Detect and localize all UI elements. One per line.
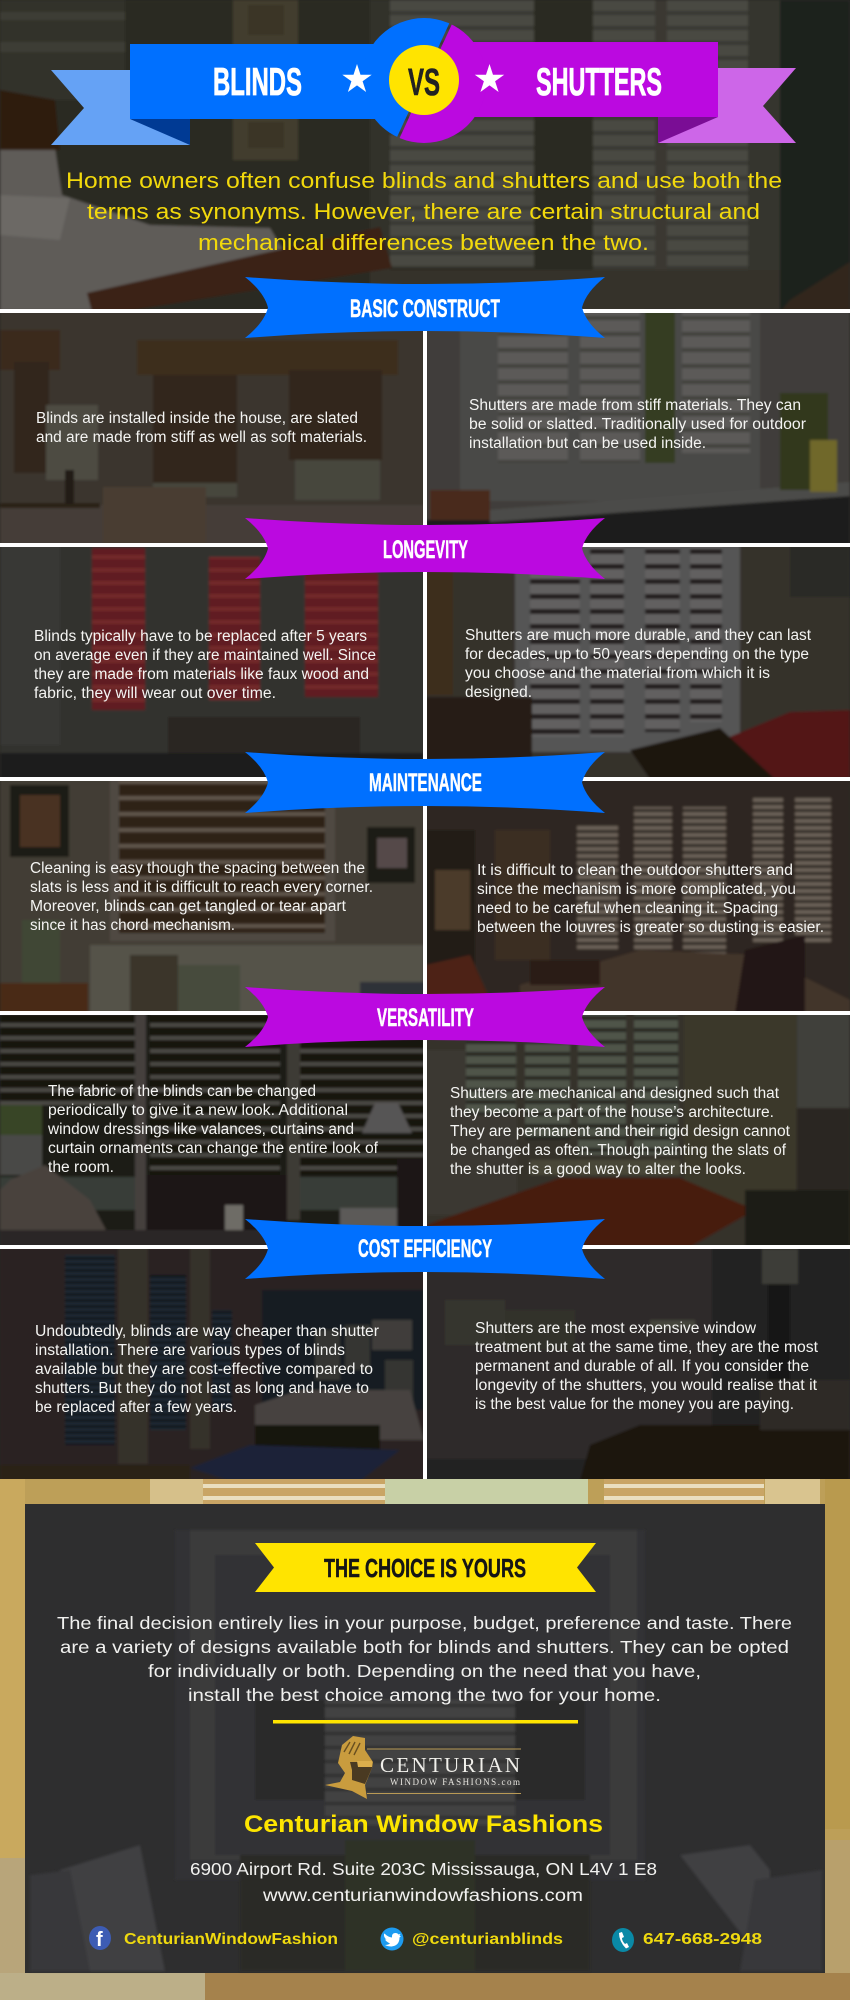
text: cost efficiency, blinds: Undoubtedly, blinds are way cheaper than shutter [35, 1323, 379, 1340]
section ribbon: longevity: LONGEVITY [383, 536, 468, 564]
text: longevity, shutters: Shutters are much more durable, and they can last [465, 627, 812, 644]
section ribbon: maintenance [245, 752, 605, 813]
text: longevity, blinds [34, 628, 376, 702]
text: versatility, shutters: be changed as often. Though painting the slats of [450, 1142, 787, 1159]
photo: sitting room with dark shutters [426, 779, 850, 1013]
photo: living room with roman shades [0, 311, 424, 545]
section ribbon: versatility: VERSATILITY [377, 1004, 474, 1032]
photo: dining room with plantation shutters [426, 545, 850, 779]
vs badge [389, 45, 459, 115]
header banner: blinds vs shutters [51, 18, 796, 145]
panel: the choice is yours [25, 1504, 825, 1973]
text: maintenance, shutters: need to be careful when cleaning it. Spacing [477, 900, 778, 917]
text: cost efficiency, blinds: shutters. But they do not last as long and have to [35, 1380, 369, 1397]
blue banner half [130, 18, 450, 137]
text: maintenance, shutters: It is difficult to clean the outdoor shutters and [477, 862, 793, 879]
address and website: www.centurianwindowfashions.com [262, 1885, 583, 1905]
text: basic construct, shutters [469, 397, 806, 452]
panel: longevity, shutters [426, 545, 850, 779]
section ribbon: maintenance: MAINTENANCE [369, 769, 482, 797]
text: versatility, shutters [450, 1085, 791, 1178]
text: basic construct, blinds [36, 410, 367, 446]
social: phone: 647-668-2948 [643, 1931, 762, 1948]
text: cost efficiency, shutters: longevity of the shutters, you would realise that it [475, 1377, 818, 1394]
yellow ribbon heading [255, 1543, 596, 1592]
photo: room with dark wood blinds [0, 1013, 424, 1247]
address and website: 6900 Airport Rd. Suite 203C Mississauga, ON L4V 1 E8 [190, 1859, 657, 1879]
company name: Centurian Window Fashions [244, 1811, 603, 1838]
intro text: terms as synonyms. However, there are certain structural and [87, 199, 760, 224]
panel: cost efficiency, blinds [0, 1247, 424, 1481]
text: versatility, shutters: They are permanent and their rigid design cannot [450, 1123, 791, 1140]
text: longevity, blinds: on average even if they are maintained well. Since [34, 647, 376, 664]
text: cost efficiency, blinds [35, 1323, 379, 1416]
text: cost efficiency, blinds: be replaced after a few years. [35, 1399, 237, 1416]
conclusion text: install the best choice among the two for your home. [188, 1685, 661, 1705]
conclusion text: are a variety of designs available both for blinds and shutters. They can be opted [60, 1637, 789, 1657]
section ribbon: cost efficiency [245, 1219, 605, 1279]
text: longevity, blinds: Blinds typically have to be replaced after 5 years [34, 628, 367, 645]
title: blinds: BLINDS [213, 61, 302, 104]
panel: basic construct, blinds [0, 311, 424, 545]
text: versatility, shutters: the shutter is a good way to alter the looks. [450, 1161, 746, 1178]
photo: hallway with grey shutters [426, 1013, 850, 1247]
section ribbon: longevity [245, 518, 605, 579]
text: maintenance, shutters: since the mechanism is more complicated, you [477, 881, 796, 898]
intro text: mechanical differences between the two. [198, 230, 649, 255]
text: cost efficiency, shutters: permanent and durable of all. If you consider the [475, 1358, 809, 1375]
section ribbon: cost efficiency: COST EFFICIENCY [358, 1235, 492, 1263]
panel background [25, 1504, 825, 1973]
text: maintenance, blinds [30, 860, 373, 934]
text: maintenance, shutters [477, 862, 824, 936]
text: longevity, shutters: you choose and the material from which it is [465, 665, 770, 682]
text: longevity, blinds: they are made from materials like faux wood and [34, 666, 369, 683]
panel: longevity, blinds [0, 545, 424, 779]
photo: dining room background [0, 1479, 850, 2000]
purple banner half [400, 24, 718, 143]
photo: kitchen with white shutters [426, 311, 850, 545]
title: shutters: SHUTTERS [536, 61, 662, 104]
text: cost efficiency, shutters [475, 1320, 819, 1413]
social: twitter: @centurianblinds [412, 1931, 563, 1948]
panel: versatility, shutters [426, 1013, 850, 1247]
text: basic construct, blinds: and are made from stiff as well as soft materials. [36, 429, 367, 446]
address and website [190, 1859, 657, 1905]
photo: lounge with wood blinds [0, 779, 424, 1013]
text: versatility, blinds: curtain ornaments can change the entire look of [48, 1140, 379, 1157]
panel: maintenance, shutters [426, 779, 850, 1013]
text: longevity, shutters [465, 627, 812, 701]
panel: maintenance, blinds [0, 779, 424, 1013]
text: maintenance, blinds: Cleaning is easy though the spacing between the [30, 860, 365, 877]
intro text: Home owners often confuse blinds and shutters and use both the [66, 168, 782, 193]
section ribbon: versatility [245, 987, 605, 1047]
icon: phone [612, 1928, 634, 1952]
left ribbon tail [51, 70, 190, 145]
text: maintenance, blinds: slats is less and it is difficult to reach every corner. [30, 879, 373, 896]
conclusion text: The final decision entirely lies in your purpose, budget, preference and taste. There [57, 1613, 792, 1633]
logo: centurian window fashions [325, 1736, 521, 1799]
text: cost efficiency, shutters: is the best value for the money you are paying. [475, 1396, 794, 1413]
logo: centurian window fashions: CENTURIAN [380, 1753, 520, 1777]
text: versatility, blinds: periodically to give it a new look. Additional [48, 1102, 348, 1119]
text: versatility, shutters: they become a part of the house’s architecture. [450, 1104, 774, 1121]
text: versatility, shutters: Shutters are mechanical and designed such that [450, 1085, 780, 1102]
social: phone [612, 1928, 762, 1952]
section ribbon: basic construct [245, 277, 605, 338]
text: longevity, blinds: fabric, they will wear out over time. [34, 685, 276, 702]
conclusion text [57, 1613, 792, 1705]
logo: centurian window fashions: WINDOW FASHIONS.com [390, 1777, 520, 1787]
icon: star right [475, 64, 504, 92]
text: versatility, blinds: The fabric of the blinds can be changed [48, 1083, 316, 1100]
photo: room with red zebra blinds [0, 545, 424, 779]
panel: versatility, blinds [0, 1013, 424, 1247]
photo: dim room with clock [426, 1247, 850, 1481]
text: basic construct, shutters: be solid or slatted. Traditionally used for outdoor [469, 416, 806, 433]
section ribbon: basic construct: BASIC CONSTRUCT [350, 295, 500, 323]
text: longevity, shutters: for decades, up to 50 years depending on the type [465, 646, 809, 663]
text: versatility, blinds: the room. [48, 1159, 114, 1176]
vs badge: VS [408, 62, 440, 104]
photo: bedroom with navy walls [0, 1247, 424, 1481]
text: cost efficiency, blinds: available but they are cost-effective compared to [35, 1361, 373, 1378]
social: facebook [89, 1926, 338, 1951]
text: cost efficiency, shutters: treatment but at the same time, they are the most [475, 1339, 819, 1356]
text: versatility, blinds: window dressings like valances, curtains and [47, 1121, 354, 1138]
right ribbon tail [658, 68, 796, 143]
social: twitter [380, 1928, 563, 1950]
icon: facebook: f [96, 1929, 103, 1951]
social: facebook: CenturianWindowFashion [124, 1931, 338, 1948]
row dividers [0, 309, 850, 1479]
text: basic construct, blinds: Blinds are installed inside the house, are slated [36, 410, 358, 427]
text: basic construct, shutters: installation but can be used inside. [469, 435, 706, 452]
intro text [66, 168, 782, 255]
text: basic construct, shutters: Shutters are made from stiff materials. They can [469, 397, 801, 414]
text: maintenance, blinds: Moreover, blinds can get tangled or tear apart [30, 898, 347, 915]
icon: facebook [89, 1926, 111, 1951]
text: cost efficiency, blinds: installation. There are various types of blinds [35, 1342, 345, 1359]
photo: hero bedroom background [0, 0, 850, 312]
panel: cost efficiency, shutters [426, 1247, 850, 1481]
text: maintenance, shutters: between the louvres is greater so dusting is easier. [477, 919, 824, 936]
yellow ribbon heading: THE CHOICE IS YOURS [324, 1553, 526, 1583]
icon: star left [342, 64, 372, 92]
icon: twitter [380, 1928, 404, 1950]
conclusion text: for individually or both. Depending on the need that you have, [148, 1661, 701, 1681]
text: cost efficiency, shutters: Shutters are the most expensive window [475, 1320, 757, 1337]
text: versatility, blinds [47, 1083, 379, 1176]
text: longevity, shutters: designed. [465, 684, 532, 701]
text: maintenance, blinds: since it has chord mechanism. [30, 917, 235, 934]
panel: basic construct, shutters [426, 311, 850, 545]
